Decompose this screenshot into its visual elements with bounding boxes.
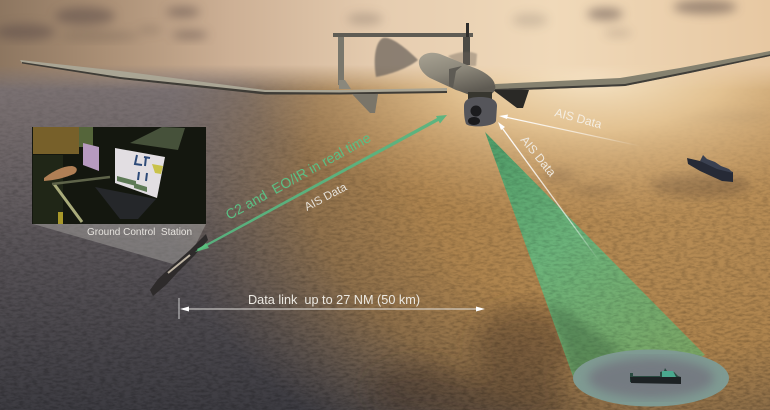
label: AIS Data right: AIS Data xyxy=(553,105,604,131)
laptop keyboard xyxy=(95,187,156,219)
right wing xyxy=(495,51,770,91)
desk rail xyxy=(54,184,82,222)
label: data link range: Data link up to 27 NM (50 km) xyxy=(248,293,420,307)
target area with tanker xyxy=(573,350,729,406)
arrow: AIS data from target xyxy=(498,122,600,262)
propeller xyxy=(375,38,418,77)
arrow: AIS data from right vessel xyxy=(499,105,640,146)
beam shadow xyxy=(548,302,620,376)
fuselage xyxy=(419,53,495,97)
label: C2 and EO/IR in real time: C2 and EO/IR in real time xyxy=(223,129,374,223)
left wing xyxy=(20,60,447,94)
callout projection cone xyxy=(33,224,206,264)
data link range arrow xyxy=(179,293,485,319)
laptop screen xyxy=(115,148,165,198)
ship: right distant vessel xyxy=(687,155,733,182)
hand xyxy=(44,166,77,181)
tail fins xyxy=(352,94,378,113)
sensor beam xyxy=(485,132,705,377)
arrow: C2 and EO/IR data link xyxy=(195,115,447,252)
ship: ground control vessel xyxy=(150,234,208,296)
small monitor xyxy=(83,143,99,171)
label: AIS Data to vessel: AIS Data xyxy=(303,181,350,214)
clouds xyxy=(0,0,737,41)
panel: ground control station callout xyxy=(32,127,206,264)
label: AIS Data beam: AIS Data xyxy=(518,133,559,179)
dark water patches xyxy=(370,305,575,410)
twin boom tail xyxy=(333,33,473,37)
drone xyxy=(20,23,770,126)
label: ground control station: Ground Control Station xyxy=(87,227,192,238)
gimbal camera turret xyxy=(468,92,492,99)
ground control station photo xyxy=(32,127,206,224)
